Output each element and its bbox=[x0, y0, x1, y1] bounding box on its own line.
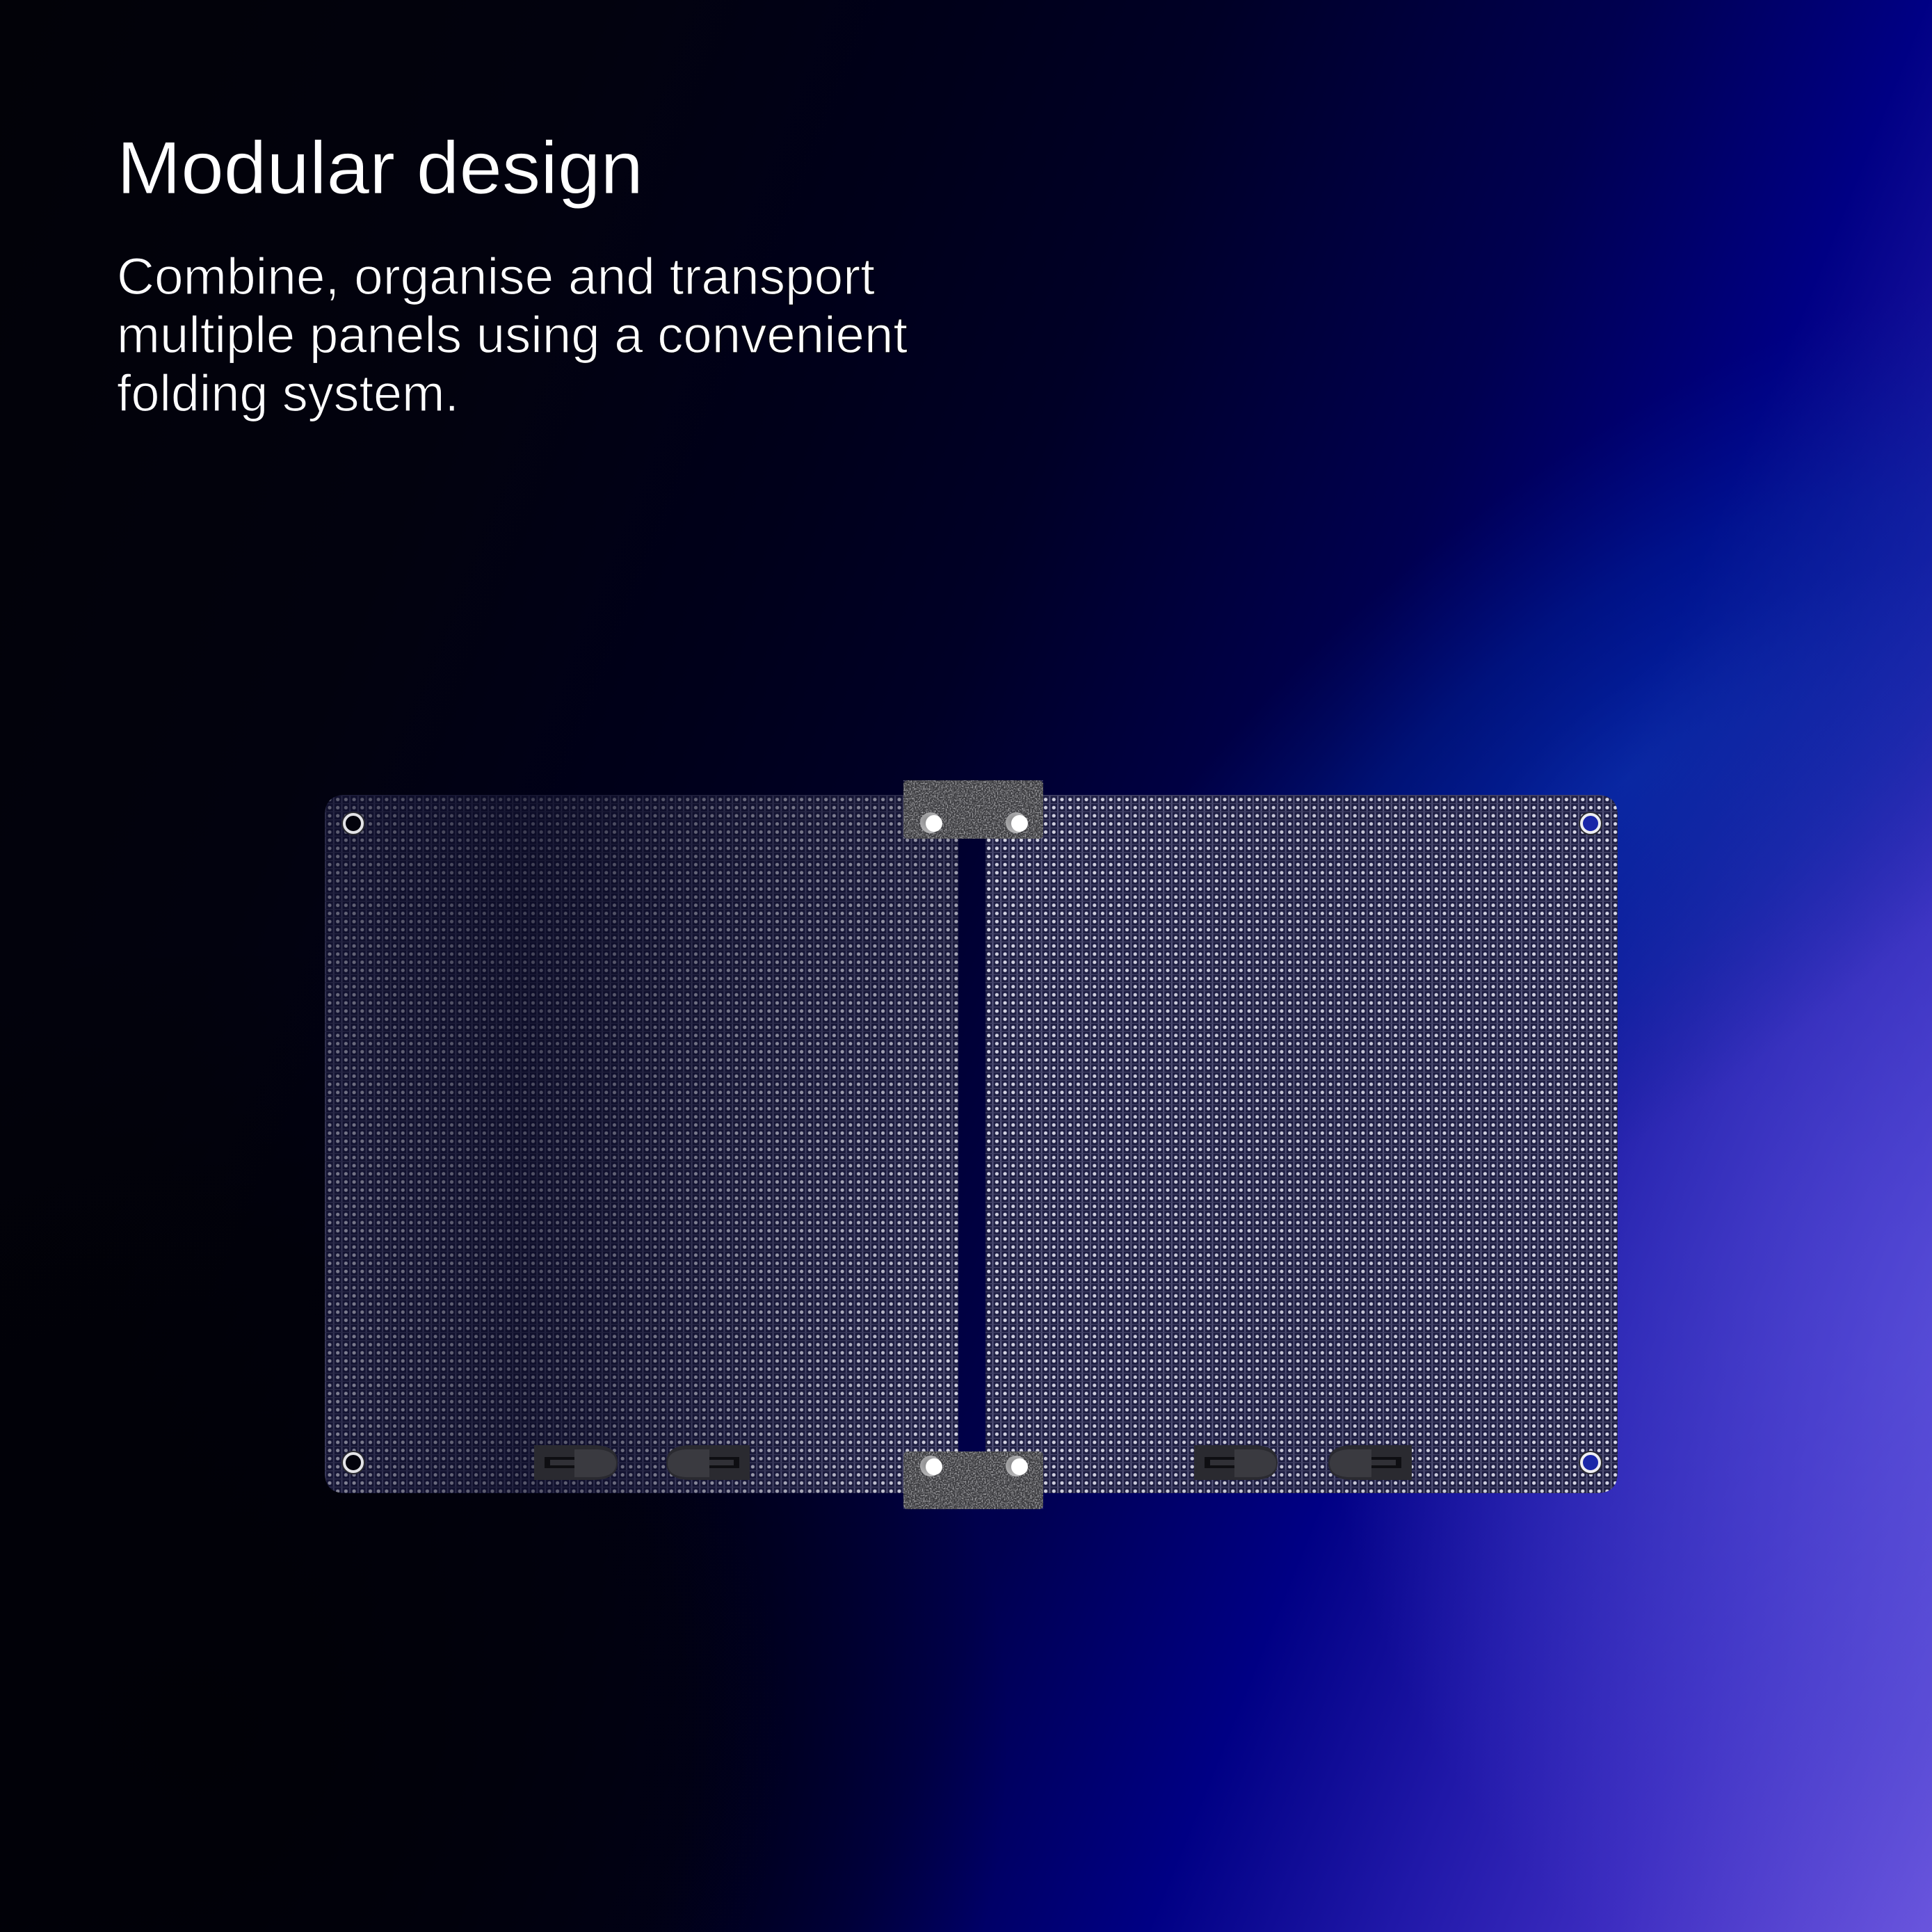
body text bbox=[117, 248, 908, 422]
body text: folding system. bbox=[117, 364, 459, 422]
icon: screw bottom right bbox=[1006, 1456, 1028, 1476]
icon: eyelet bottom right bbox=[1579, 1451, 1602, 1474]
icon: screw bottom left bbox=[920, 1456, 942, 1476]
icon: latch left 1 bbox=[534, 1445, 618, 1480]
icon: latch right 1 bbox=[1194, 1445, 1278, 1480]
title: Modular design bbox=[117, 126, 643, 209]
icon: latch left 2 bbox=[666, 1445, 750, 1480]
icon: screw top right bbox=[1006, 812, 1028, 833]
icon: eyelet top left bbox=[341, 812, 365, 835]
body text: Combine, organise and transport bbox=[117, 248, 875, 305]
bottom hinge clip bbox=[903, 1451, 1043, 1509]
icon: eyelet top right bbox=[1579, 812, 1602, 835]
icon: eyelet bottom left bbox=[341, 1451, 365, 1474]
body text: multiple panels using a convenient bbox=[117, 306, 908, 364]
top hinge clip bbox=[903, 780, 1043, 839]
icon: screw top left bbox=[920, 812, 942, 833]
panel: left solar panel bbox=[325, 795, 958, 1493]
panel: right solar panel bbox=[985, 795, 1618, 1493]
icon: latch right 2 bbox=[1328, 1445, 1412, 1480]
